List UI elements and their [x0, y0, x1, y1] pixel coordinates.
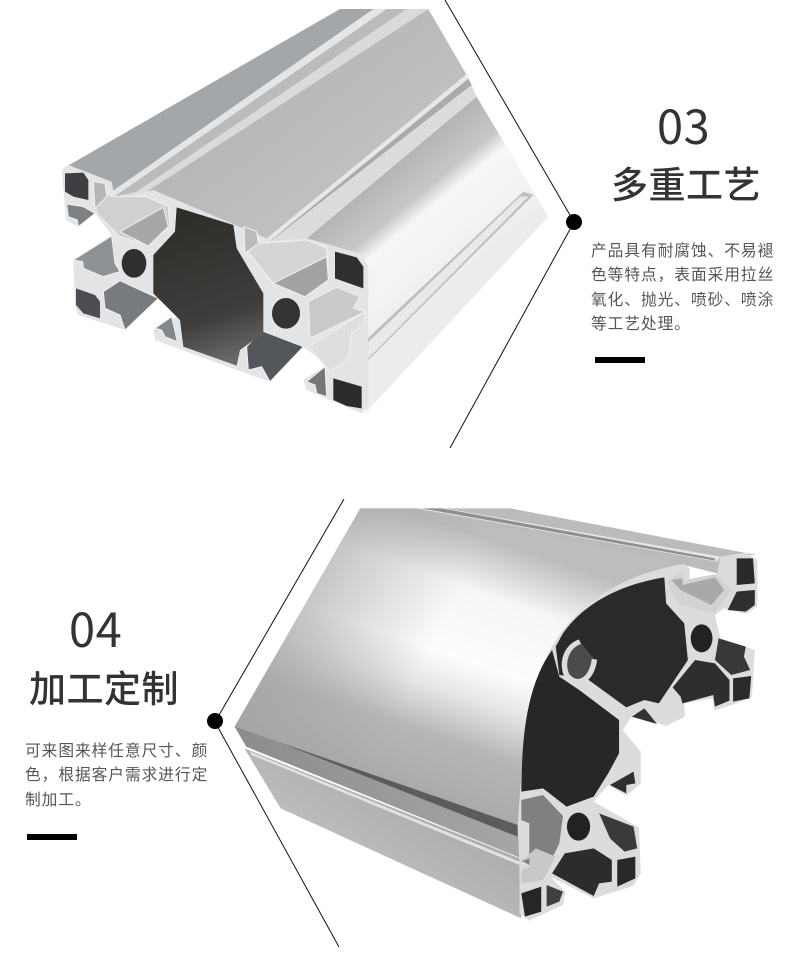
bright groove left: [112, 9, 428, 200]
text block: 多重工艺 description: 等工艺处理。: [591, 311, 691, 334]
text block: 多重工艺 description: [591, 238, 774, 334]
number 04: 04: [69, 592, 122, 661]
connector lines: top: [445, 0, 574, 448]
slot interiors: [67, 182, 365, 397]
lower rail: [350, 192, 533, 363]
right side face: [307, 97, 548, 413]
text block: 加工定制 description: 色，根据客户需求进行定: [25, 762, 208, 785]
C-shaped screw boss: [564, 642, 594, 681]
groove middle: [267, 75, 472, 243]
heading: 加工定制: 加工定制: [29, 659, 179, 713]
text block: 加工定制 description: 制加工。: [25, 787, 92, 810]
marker dot: bottom: [207, 713, 223, 729]
accent bar: left: [27, 834, 77, 840]
hollow chambers: [737, 558, 755, 585]
text block: 多重工艺 description: 色等特点，表面采用拉丝: [591, 262, 774, 285]
top rail: [416, 508, 757, 573]
lower groove: [235, 717, 521, 858]
text block: 多重工艺 description: 氧化、抛光、喷砂、喷涂: [591, 287, 774, 310]
connector lines: bottom: [215, 499, 344, 947]
curved main face: [235, 508, 684, 825]
text block: 加工定制 description: 可来图来样任意尺寸、颜: [25, 738, 208, 761]
image: top aluminium profile: [62, 9, 548, 413]
slot interiors: [668, 572, 731, 613]
number 03: 03: [657, 89, 710, 158]
accent bar: right: [595, 357, 645, 363]
lower side face: [244, 748, 521, 918]
profile cross-section face: [518, 553, 757, 921]
top central face: [147, 9, 467, 243]
image: bottom aluminium profile: [235, 508, 757, 921]
marker dot: top: [566, 214, 582, 230]
top-left rail: [63, 9, 387, 197]
profile cross-section face: [62, 165, 368, 413]
text block: 加工定制 description: [25, 738, 208, 810]
hollow chambers: [65, 173, 88, 200]
text block: 多重工艺 description: 产品具有耐腐蚀、不易褪: [591, 238, 774, 261]
heading: 多重工艺: 多重工艺: [611, 155, 761, 209]
